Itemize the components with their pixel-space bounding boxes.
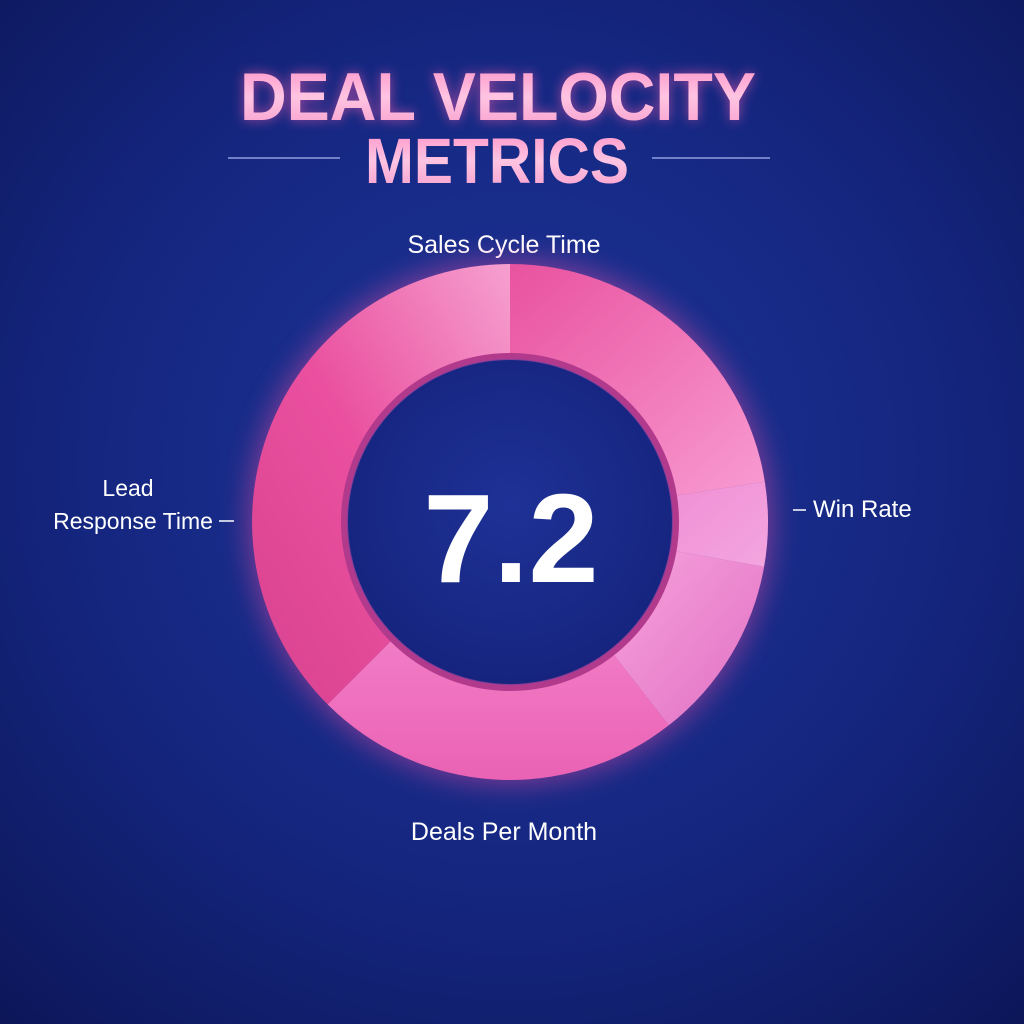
center value: 7.2 [423, 468, 599, 609]
segment: deals per month [328, 639, 669, 780]
label: deals per month: Deals Per Month [411, 818, 597, 846]
segment: win rate [674, 482, 768, 567]
title: DEAL VELOCITY [240, 59, 756, 135]
label: sales cycle time: Sales Cycle Time [407, 231, 601, 259]
segment: sales cycle time [510, 264, 765, 496]
title [228, 59, 770, 197]
donut chart [248, 260, 772, 784]
title: METRICS [365, 125, 629, 197]
label: lead response time: Lead [102, 475, 154, 501]
title: DEAL VELOCITY [240, 59, 756, 135]
label: win rate: Win Rate [813, 496, 912, 523]
label: lead response time: Response Time [53, 508, 213, 534]
segment: lower right [612, 551, 764, 725]
label: lead response time [53, 475, 234, 534]
segment: lead response time [252, 264, 510, 704]
